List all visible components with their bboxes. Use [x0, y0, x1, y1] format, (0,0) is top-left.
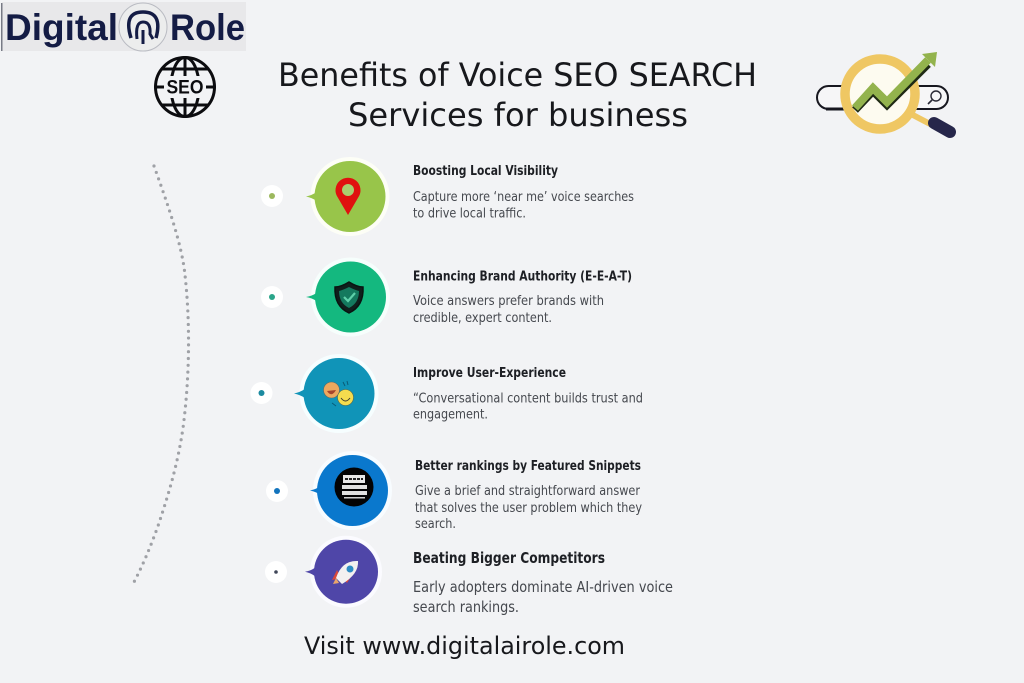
- logo: Digital AI Role: Digital: [5, 7, 118, 48]
- icon: shield bubble: [306, 258, 390, 336]
- text: better rankings by featured snippets: search.: [415, 516, 456, 532]
- icon: map pin bubble: [306, 157, 390, 236]
- logo: Digital AI Role: Role: [170, 7, 245, 48]
- icon: search bar with magnifier and growth arrow: [817, 52, 950, 132]
- text: beating bigger competitors: Beating Bigger Competitors: [413, 549, 605, 567]
- item 4: better rankings by featured snippets: [266, 451, 642, 532]
- icon: SEO globe: SEO: [166, 78, 204, 98]
- title: Benefits of Voice SEO SEARCH: [278, 56, 757, 94]
- icon: rocket bubble: [305, 536, 382, 608]
- node dot 5: [265, 561, 287, 583]
- text: enhancing brand authority: Enhancing Brand Authority (E-E-A-T): [413, 268, 632, 284]
- text: beating bigger competitors: Early adopters dominate AI-driven voice: [413, 578, 673, 596]
- icon: snippet bubble: [310, 451, 392, 530]
- text: boosting local visibility: to drive local traffic.: [413, 206, 526, 222]
- dotted arc: [133, 166, 189, 584]
- text: boosting local visibility: Capture more ‘near me’ voice searches: [413, 189, 634, 205]
- item 2: enhancing brand authority: [261, 258, 632, 336]
- text: boosting local visibility: Boosting Local Visibility: [413, 163, 558, 179]
- logo: Digital AI Role: [1, 2, 246, 51]
- node dot 3: [250, 382, 272, 404]
- text: improve user-experience: [413, 365, 643, 422]
- node dot 2: [261, 286, 283, 308]
- node dot 1: [261, 185, 283, 207]
- item 3: improve user-experience: [250, 354, 643, 433]
- text: better rankings by featured snippets: Give a brief and straightforward answer: [415, 483, 640, 499]
- text: better rankings by featured snippets: that solves the user problem which they: [415, 500, 642, 516]
- text: improve user-experience: Improve User-Experience: [413, 365, 566, 381]
- item 5: beating bigger competitors: [265, 536, 673, 616]
- item 1: boosting local visibility: [261, 157, 634, 236]
- icon: smiling faces bubble: [294, 354, 378, 433]
- text: boosting local visibility: [413, 163, 634, 222]
- text: better rankings by featured snippets: Better rankings by Featured Snippets: [415, 458, 641, 474]
- text: enhancing brand authority: Voice answers prefer brands with: [413, 293, 604, 309]
- text: improve user-experience: engagement.: [413, 406, 488, 422]
- footer: website link: Visit www.digitalairole.com: [304, 632, 625, 660]
- text: enhancing brand authority: credible, expert content.: [413, 310, 552, 326]
- text: improve user-experience: “Conversational content builds trust and: [413, 390, 643, 406]
- title: Services for business: [348, 96, 688, 134]
- text: beating bigger competitors: [413, 549, 673, 616]
- text: enhancing brand authority: [413, 268, 632, 326]
- title: [278, 56, 757, 134]
- text: beating bigger competitors: search rankings.: [413, 598, 519, 616]
- node dot 4: [266, 480, 288, 502]
- icon: SEO globe: [154, 58, 216, 117]
- text: better rankings by featured snippets: [415, 458, 642, 532]
